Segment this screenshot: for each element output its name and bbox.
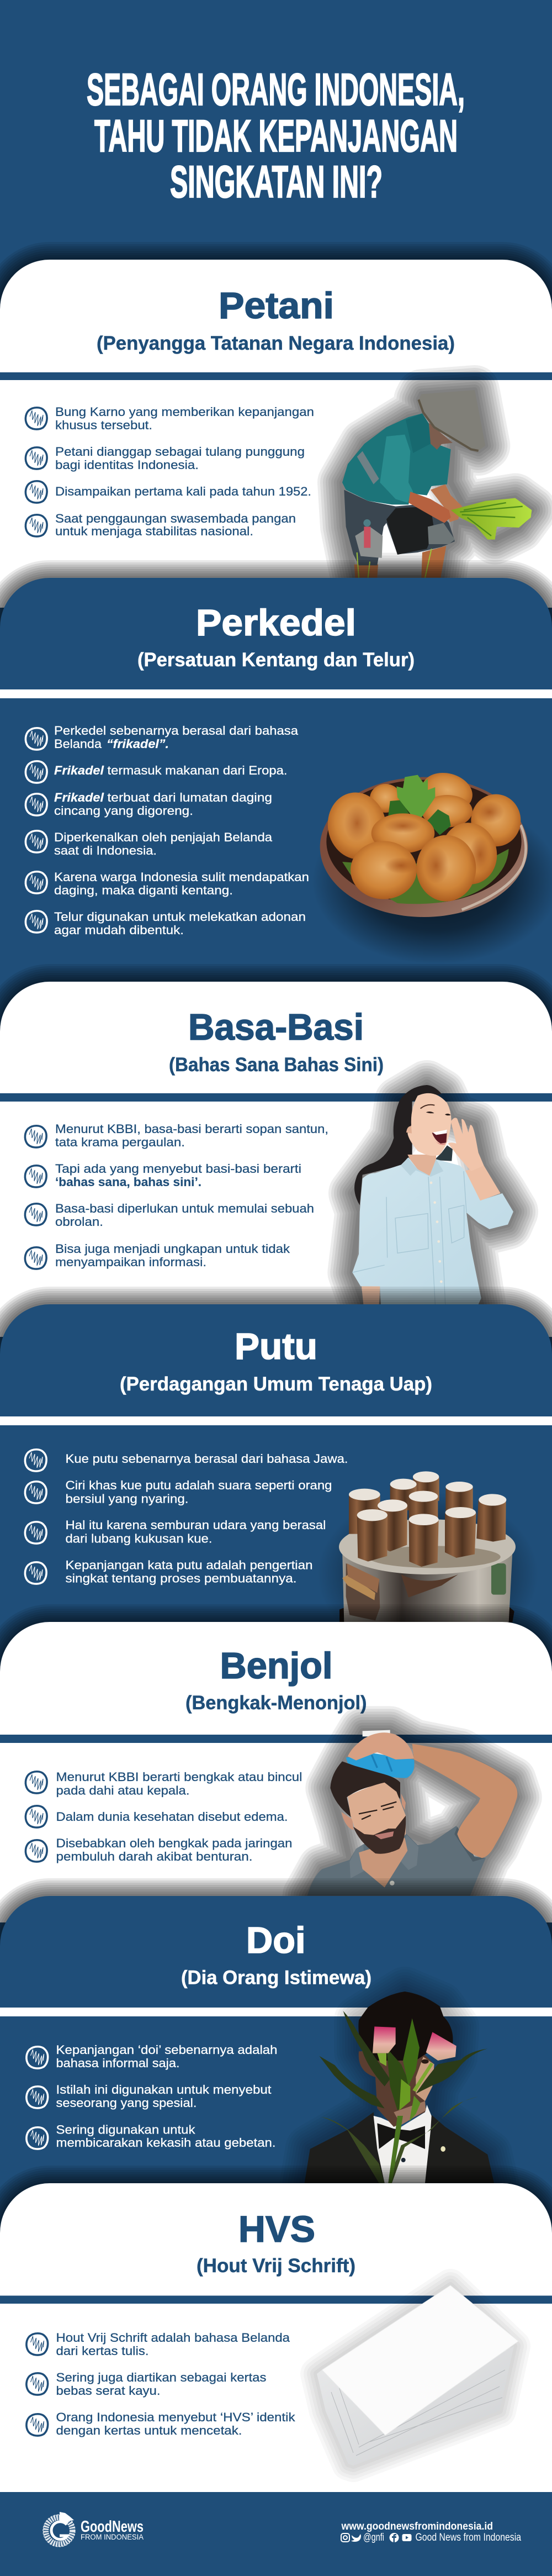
bullet 3: cincang yang digoreng.	[54, 804, 193, 818]
bullet 4: singkat tentang proses pembuatannya.	[65, 1571, 297, 1585]
title: SINGKATAN INI?	[170, 157, 383, 207]
bullet 1	[26, 2331, 290, 2358]
bullet 4: untuk menjaga stabilitas nasional.	[55, 524, 253, 538]
bullet 1: “frikadel”.	[107, 737, 169, 751]
photo: plate of perkedel	[312, 767, 552, 964]
heading: Perkedel: Perkedel	[196, 602, 356, 644]
website and social handles: @gnfi	[363, 2532, 384, 2543]
bullet 2: bebas serat kayu.	[56, 2384, 160, 2398]
bullet 4: Diperkenalkan oleh penjajah Belanda	[54, 830, 273, 844]
bullet 2: bagi identitas Indonesia.	[55, 458, 199, 472]
bullet 2	[25, 445, 305, 472]
bullet 3: Disampaikan pertama kali pada tahun 1952.	[55, 484, 311, 498]
bullet 1: Kue putu sebenarnya berasal dari bahasa Jawa.	[65, 1452, 348, 1466]
icon: facebook	[390, 2533, 399, 2543]
bullet 2: bersiul yang nyaring.	[65, 1492, 189, 1506]
photo: man with ice pack	[307, 1730, 517, 1896]
bullet 2	[25, 761, 287, 783]
logo: GoodNews from Indonesia	[43, 2512, 144, 2547]
bullet 2	[26, 2083, 272, 2110]
subheading: Basa-Basi: (Bahas Sana Bahas Sini)	[169, 1054, 384, 1076]
panel: Petani	[0, 260, 552, 608]
bullet 2: Petani dianggap sebagai tulang punggung	[55, 445, 305, 459]
bullet 4	[25, 830, 273, 857]
bullet 1	[26, 2043, 277, 2070]
bullet 3	[25, 1202, 314, 1229]
heading: Putu: Putu	[235, 1326, 317, 1367]
bullet 2: ‘bahas sana, bahas sini’.	[55, 1175, 201, 1189]
icon: instagram	[341, 2533, 349, 2542]
bullet 2: Sering juga diartikan sebagai kertas	[56, 2370, 266, 2384]
bullet 2: Tapi ada yang menyebut basi-basi berarti	[55, 1162, 301, 1176]
bullet 5: Karena warga Indonesia sulit mendapatkan	[54, 870, 309, 884]
bullet 5	[25, 870, 309, 897]
bullet 3	[25, 481, 311, 503]
heading: Petani: Petani	[219, 285, 334, 326]
icon: youtube	[402, 2534, 412, 2541]
bullet 2	[26, 2370, 266, 2398]
bullet 3: Hal itu karena semburan udara yang berasal	[65, 1518, 326, 1532]
bullet 1: khusus tersebut.	[55, 418, 152, 432]
bullet 2: seseorang yang spesial.	[56, 2096, 197, 2110]
panel: Benjol	[0, 1622, 552, 1922]
bullet 2: Ciri khas kue putu adalah suara seperti orang	[65, 1478, 332, 1492]
bullet 3	[25, 791, 272, 818]
bullet 2	[25, 1162, 301, 1189]
bullet 1: Menurut KBBI berarti bengkak atau bincul	[56, 1770, 302, 1784]
panel: Putu	[0, 1304, 552, 1657]
bullet 3: membicarakan kekasih atau gebetan.	[56, 2136, 275, 2150]
logo emblem	[43, 2512, 75, 2547]
bullet 1: Perkedel sebenarnya berasal dari bahasa	[54, 724, 299, 737]
bullet 3	[25, 1836, 292, 1863]
bullet 1	[25, 1770, 302, 1798]
bullet 3: terbuat dari lumatan daging	[107, 791, 272, 804]
bullet 3	[26, 2410, 295, 2437]
heading: HVS: HVS	[238, 2209, 315, 2250]
bullet 2	[25, 1478, 332, 1506]
bullet 1: Menurut KBBI, basa-basi berarti sopan santun,	[55, 1122, 328, 1136]
heading: Benjol: Benjol	[220, 1645, 332, 1687]
bullet 3: Sering digunakan untuk	[56, 2122, 195, 2137]
photo: man in tuxedo with roses	[305, 1992, 494, 2183]
panel: Basa-Basi	[0, 982, 552, 1337]
bullet 1	[25, 1122, 328, 1149]
panel: HVS	[0, 2183, 552, 2492]
bullet 2: Istilah ini digunakan untuk menyebut	[56, 2083, 272, 2096]
website and social handles: www.goodnewsfromindonesia.id	[341, 2521, 493, 2532]
bullet 4	[25, 512, 296, 538]
bullet 1	[25, 724, 299, 751]
subheading: Perkedel: (Persatuan Kentang dan Telur)	[137, 649, 415, 671]
bullet 4: Kepanjangan kata putu adalah pengertian	[65, 1558, 312, 1572]
bullet 2: Frikadel	[54, 763, 104, 777]
bullet 2: termasuk makanan dari Eropa.	[107, 763, 287, 777]
bullet 1: Belanda	[54, 737, 102, 751]
subheading: Putu: (Perdagangan Umum Tenaga Uap)	[120, 1373, 432, 1395]
heading: Doi: Doi	[246, 1920, 306, 1961]
bullet 1: Hout Vrij Schrift adalah bahasa Belanda	[56, 2331, 290, 2345]
website and social handles	[341, 2521, 521, 2543]
bullet 2: Dalam dunia kesehatan disebut edema.	[56, 1810, 288, 1824]
bullet 4: menyampaikan informasi.	[55, 1255, 206, 1269]
bullet 3	[25, 1518, 326, 1546]
bullet 4: saat di Indonesia.	[54, 844, 157, 857]
website and social handles: Good News from Indonesia	[415, 2532, 521, 2543]
photo: farmer planting rice	[342, 390, 532, 578]
bullet 1: dari kertas tulis.	[56, 2344, 149, 2358]
bullet 1: Kepanjangan ‘doi’ sebenarnya adalah	[56, 2043, 277, 2057]
bullet 1	[25, 405, 314, 432]
bullet 3: Basa-basi diperlukan untuk memulai sebuah	[55, 1202, 314, 1215]
photo: woman shouting	[352, 1085, 513, 1304]
bullet 3: Frikadel	[54, 791, 104, 804]
bullet 1: Bung Karno yang memberikan kepanjangan	[55, 405, 314, 419]
bullet 6: Telur digunakan untuk melekatkan adonan	[54, 910, 306, 924]
bullet 5: daging, maka diganti kentang.	[54, 883, 233, 897]
bullet 1: pada dahi atau kepala.	[56, 1783, 190, 1798]
bullet 1: tata krama pergaulan.	[55, 1135, 185, 1149]
bullet 3: dari lubang kukusan kue.	[65, 1531, 212, 1546]
bullet 3: Disebabkan oleh bengkak pada jaringan	[56, 1836, 293, 1850]
panel: Perkedel	[0, 578, 552, 1008]
bullet 1	[25, 1450, 348, 1471]
logo: GoodNews from Indonesia: FROM INDONESIA	[81, 2533, 144, 2541]
bullet 4	[25, 1242, 290, 1269]
subheading: Benjol: (Bengkak-Menonjol)	[185, 1692, 367, 1714]
subheading: HVS: (Hout Vrij Schrift)	[197, 2255, 355, 2277]
bullet 3	[26, 2122, 275, 2150]
subheading: Petani: (Penyangga Tatanan Negara Indonesia)	[97, 333, 455, 354]
bullet 1: bahasa informal saja.	[56, 2056, 180, 2070]
logo: GoodNews from Indonesia: GoodNews	[81, 2518, 144, 2536]
bullet 3: Orang Indonesia menyebut ‘HVS’ identik	[56, 2410, 295, 2424]
footer	[0, 2492, 552, 2576]
bullet 4: Bisa juga menjadi ungkapan untuk tidak	[55, 1242, 290, 1256]
photo: stack of paper	[317, 2285, 518, 2466]
bullet 6: agar mudah dibentuk.	[54, 923, 184, 937]
bullet 2	[25, 1806, 288, 1827]
heading: Basa-Basi: Basa-Basi	[188, 1007, 364, 1048]
photo: kue putu steamer	[317, 1471, 538, 1657]
icon: twitter	[351, 2534, 361, 2542]
bullet 3: dengan kertas untuk mencetak.	[56, 2424, 242, 2437]
bullet 3: obrolan.	[55, 1215, 103, 1229]
panel: Doi	[0, 1896, 552, 2210]
bullet 3: pembuluh darah akibat benturan.	[56, 1850, 253, 1863]
bullet 4: Saat penggaungan swasembada pangan	[55, 512, 296, 525]
subheading: Doi: (Dia Orang Istimewa)	[181, 1967, 371, 1989]
title	[87, 65, 465, 207]
bullet 6	[25, 910, 306, 937]
bullet 4	[25, 1558, 313, 1585]
